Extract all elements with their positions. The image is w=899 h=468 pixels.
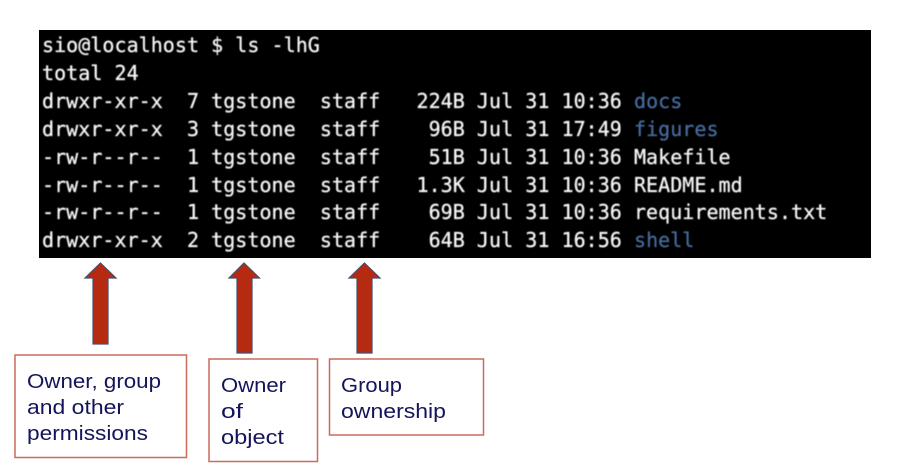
callout: group ownership: ownership — [341, 400, 446, 423]
callout: owner of object: object — [221, 426, 284, 449]
terminal text — [42, 33, 827, 252]
terminal text: -rw-r--r-- 1 tgstone staff 69B Jul 31 10:36 requirements.txt — [42, 200, 827, 224]
terminal text: drwxr-xr-x 3 tgstone staff 96B Jul 31 17:49 figures — [42, 117, 719, 141]
terminal panel — [39, 30, 871, 258]
callout: owner, group and other permissions — [15, 355, 186, 458]
callout: owner, group and other permissions: and other — [27, 396, 124, 419]
terminal text: drwxr-xr-x 2 tgstone staff 64B Jul 31 16:56 shell — [42, 228, 694, 252]
terminal text: -rw-r--r-- 1 tgstone staff 51B Jul 31 10:36 Makefile — [42, 145, 731, 169]
arrow: permissions — [85, 263, 116, 344]
terminal text: drwxr-xr-x 7 tgstone staff 224B Jul 31 10:36 docs — [42, 89, 682, 113]
callout: owner of object: Owner — [221, 374, 286, 397]
callout: owner, group and other permissions: Owner, group — [27, 370, 161, 393]
callout: group ownership — [330, 359, 484, 435]
terminal text: sio@localhost $ ls -lhG — [42, 33, 320, 57]
callout: group ownership: Group — [341, 374, 402, 397]
arrow: group — [349, 263, 380, 353]
terminal text: -rw-r--r-- 1 tgstone staff 1.3K Jul 31 10:36 README.md — [42, 173, 743, 197]
callout: owner of object: of — [221, 400, 243, 423]
arrow: owner — [229, 263, 260, 353]
callout: owner of object — [209, 359, 318, 462]
terminal text: total 24 — [42, 61, 139, 85]
callout: owner, group and other permissions: permissions — [27, 422, 148, 445]
